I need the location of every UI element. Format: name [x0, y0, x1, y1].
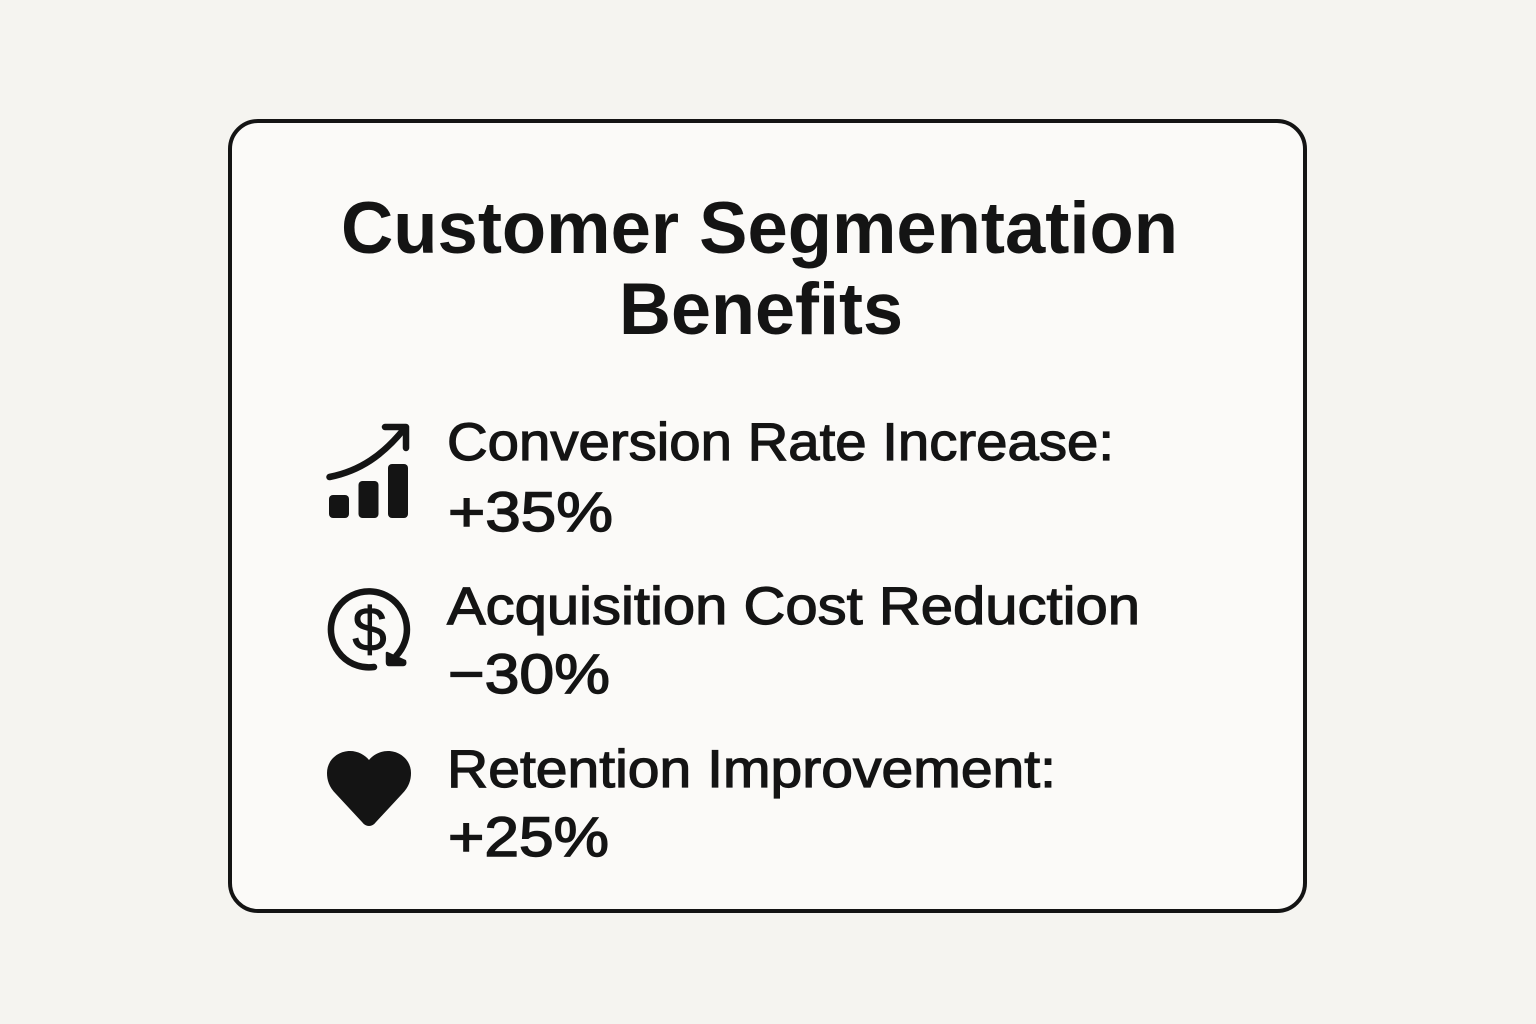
text: acquisition cost reduction: [447, 577, 1140, 705]
icon: dollar in circular arrow: $: [352, 596, 387, 665]
title: Benefits: [619, 269, 903, 350]
text: conversion rate increase: Conversion Rate Increase:: [447, 413, 1114, 472]
icon: dollar in circular arrow: [331, 591, 407, 667]
text: acquisition cost reduction: −30%: [448, 642, 610, 705]
title: Customer Segmentation: [341, 188, 1178, 269]
icon: heart: [327, 751, 411, 826]
text: conversion rate increase: +35%: [448, 480, 613, 543]
title: [341, 188, 1178, 350]
icon: rising bar chart with arrow: [329, 427, 408, 518]
text: conversion rate increase: [447, 413, 1114, 543]
text: acquisition cost reduction: Acquisition Cost Reduction: [447, 577, 1140, 636]
text: retention improvement: Retention Improvement:: [447, 740, 1056, 799]
text: retention improvement: +25%: [448, 805, 609, 868]
panel: benefits card: [230, 121, 1305, 911]
text: retention improvement: [447, 740, 1056, 868]
